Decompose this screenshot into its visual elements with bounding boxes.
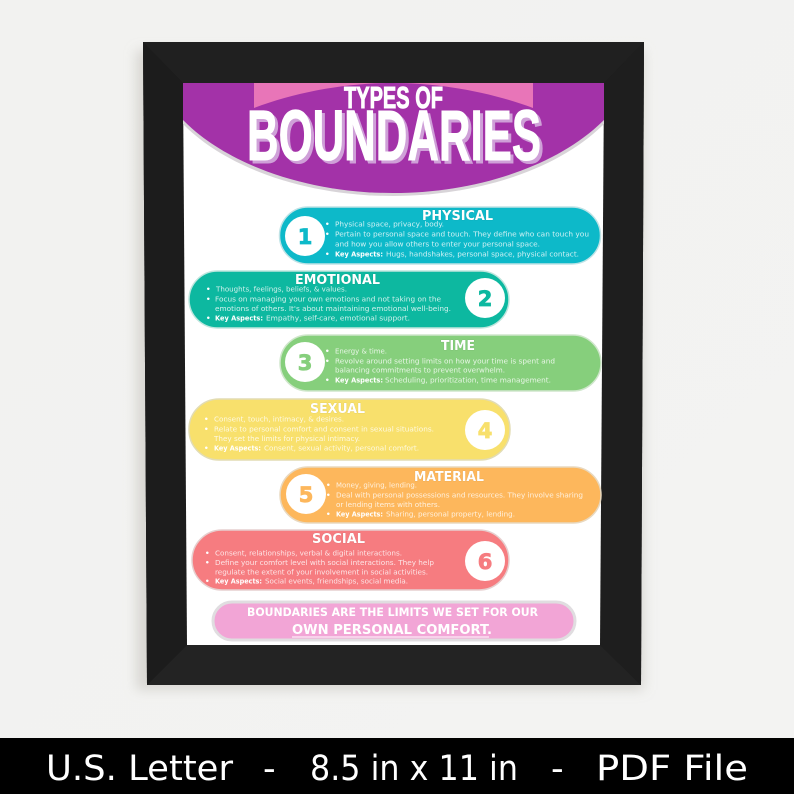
callout line 2: OWN PERSONAL COMFORT. bbox=[292, 622, 492, 638]
text block: sexual: They set the limits for physical intimacy. bbox=[213, 434, 360, 443]
text block: time: • bbox=[325, 356, 330, 366]
panel: emotional bbox=[189, 271, 509, 328]
callout: definition bbox=[213, 602, 575, 640]
footer bar: - bbox=[263, 749, 276, 789]
number badge 6 bbox=[465, 541, 505, 581]
text block: sexual: Consent, sexual activity, personal comfort. bbox=[264, 444, 419, 452]
text block: material bbox=[326, 480, 583, 518]
title line: types of: TYPES OF bbox=[344, 80, 443, 115]
text block: social bbox=[205, 548, 434, 586]
text block: time: Revolve around setting limits on how your time is spent and bbox=[335, 356, 555, 366]
text block: material: • bbox=[326, 480, 331, 490]
footer bar: - bbox=[551, 749, 564, 789]
text block: emotional: Thoughts, feelings, beliefs, & values. bbox=[215, 284, 347, 294]
text block: emotional: • bbox=[206, 284, 211, 294]
heading: social: SOCIAL bbox=[312, 532, 365, 547]
text block: sexual: Key Aspects: bbox=[214, 444, 261, 452]
text block: physical: Hugs, handshakes, personal space, physical contact. bbox=[386, 250, 579, 258]
poster bbox=[183, 80, 604, 645]
text block: physical: Physical space, privacy, body. bbox=[335, 220, 444, 228]
number badge 4: 4 bbox=[478, 419, 492, 443]
footer: dimensions: 8.5 in x 11 in bbox=[310, 749, 518, 789]
text block: physical: • bbox=[325, 250, 330, 258]
panel: sexual bbox=[189, 399, 510, 460]
panel: social bbox=[192, 530, 509, 590]
text block: time: • bbox=[325, 346, 330, 356]
text block: physical: • bbox=[325, 220, 330, 228]
text block: physical: • bbox=[325, 230, 330, 238]
footer: file type: PDF File bbox=[596, 749, 748, 789]
number badge 2: 2 bbox=[478, 287, 492, 311]
text block: social: Social events, friendships, social media. bbox=[265, 576, 408, 586]
text block: physical: and how you allow others to enter your personal space. bbox=[335, 240, 540, 248]
number badge 1 bbox=[285, 216, 325, 256]
number badge 1: 1 bbox=[298, 225, 312, 249]
heading: time: TIME bbox=[441, 339, 475, 354]
footer bar bbox=[0, 738, 794, 794]
number badge 6: 6 bbox=[478, 550, 492, 574]
text block: time: Energy & time. bbox=[335, 346, 387, 356]
text block: physical: Pertain to personal space and touch. They define who can touch you bbox=[335, 230, 589, 238]
text block: material: Money, giving, lending. bbox=[336, 480, 417, 490]
title bbox=[247, 80, 544, 179]
callout line 1: BOUNDARIES ARE THE LIMITS WE SET FOR OUR bbox=[247, 605, 538, 619]
pink ribbon bbox=[254, 83, 533, 108]
text block: time bbox=[325, 346, 555, 384]
number badge 4 bbox=[465, 410, 505, 450]
heading: physical: PHYSICAL bbox=[422, 209, 493, 224]
text block: emotional bbox=[206, 284, 451, 322]
text block: time: Key Aspects: bbox=[335, 376, 383, 384]
text block: social: Key Aspects: bbox=[215, 576, 262, 586]
text block: sexual: • bbox=[204, 444, 209, 452]
picture frame bbox=[143, 42, 644, 685]
text block: sexual: • bbox=[204, 424, 209, 434]
panel: physical bbox=[280, 207, 600, 264]
text block: social: Define your comfort level with social interactions. They help bbox=[215, 558, 434, 567]
number badge 3 bbox=[285, 342, 325, 382]
text block: sexual bbox=[204, 414, 434, 452]
text block: emotional: Focus on managing your own emotions and not taking on the bbox=[215, 294, 442, 304]
text block: emotional: Empathy, self-care, emotional support. bbox=[266, 314, 410, 322]
panel: time bbox=[280, 335, 601, 391]
panel: material bbox=[280, 467, 601, 523]
text block: material: or lending items with others. bbox=[336, 500, 440, 509]
text block: emotional: • bbox=[206, 314, 211, 322]
header banner bbox=[183, 83, 604, 196]
text block: physical: Key Aspects: bbox=[335, 250, 383, 258]
number badge 5: 5 bbox=[299, 483, 313, 507]
heading: sexual: SEXUAL bbox=[310, 402, 365, 417]
text block: social: Consent, relationships, verbal & digital interactions. bbox=[215, 548, 402, 558]
heading: material: MATERIAL bbox=[414, 470, 484, 485]
heading: emotional: EMOTIONAL bbox=[295, 273, 380, 288]
text block: social: • bbox=[205, 558, 210, 567]
text block: sexual: Relate to personal comfort and consent in sexual situations. bbox=[214, 424, 434, 434]
text block: sexual: • bbox=[204, 414, 209, 424]
number badge 2 bbox=[465, 278, 505, 318]
number badge 3: 3 bbox=[298, 351, 312, 375]
text block: emotional: • bbox=[206, 294, 211, 304]
text block: material: • bbox=[326, 510, 331, 518]
text block: time: balancing commitments to prevent overwhelm. bbox=[335, 366, 505, 374]
text block: sexual: Consent, touch, intimacy, & desires. bbox=[214, 414, 344, 424]
text block: material: • bbox=[326, 490, 331, 500]
footer: paper size: U.S. Letter bbox=[46, 749, 234, 789]
title: BOUNDARIES bbox=[250, 100, 544, 179]
title line: boundaries: BOUNDARIES bbox=[247, 97, 541, 176]
text block: social: • bbox=[205, 576, 210, 586]
text block: social: regulate the extent of your involvement in social activities. bbox=[215, 568, 428, 576]
number badge 5 bbox=[286, 474, 326, 514]
text block: time: • bbox=[325, 376, 330, 384]
text block: emotional: Key Aspects: bbox=[215, 314, 263, 322]
text block: time: Scheduling, prioritization, time management. bbox=[385, 376, 551, 384]
text block: material: Deal with personal possessions and resources. They involve sharing bbox=[336, 490, 583, 500]
frame shadow bbox=[136, 50, 644, 690]
text block: physical bbox=[325, 220, 589, 258]
text block: emotional: emotions of others. It's about maintaining emotional well-being. bbox=[215, 304, 451, 313]
text block: material: Key Aspects: bbox=[336, 510, 383, 518]
text block: social: • bbox=[205, 548, 210, 558]
text block: material: Sharing, personal property, lending. bbox=[386, 510, 515, 518]
